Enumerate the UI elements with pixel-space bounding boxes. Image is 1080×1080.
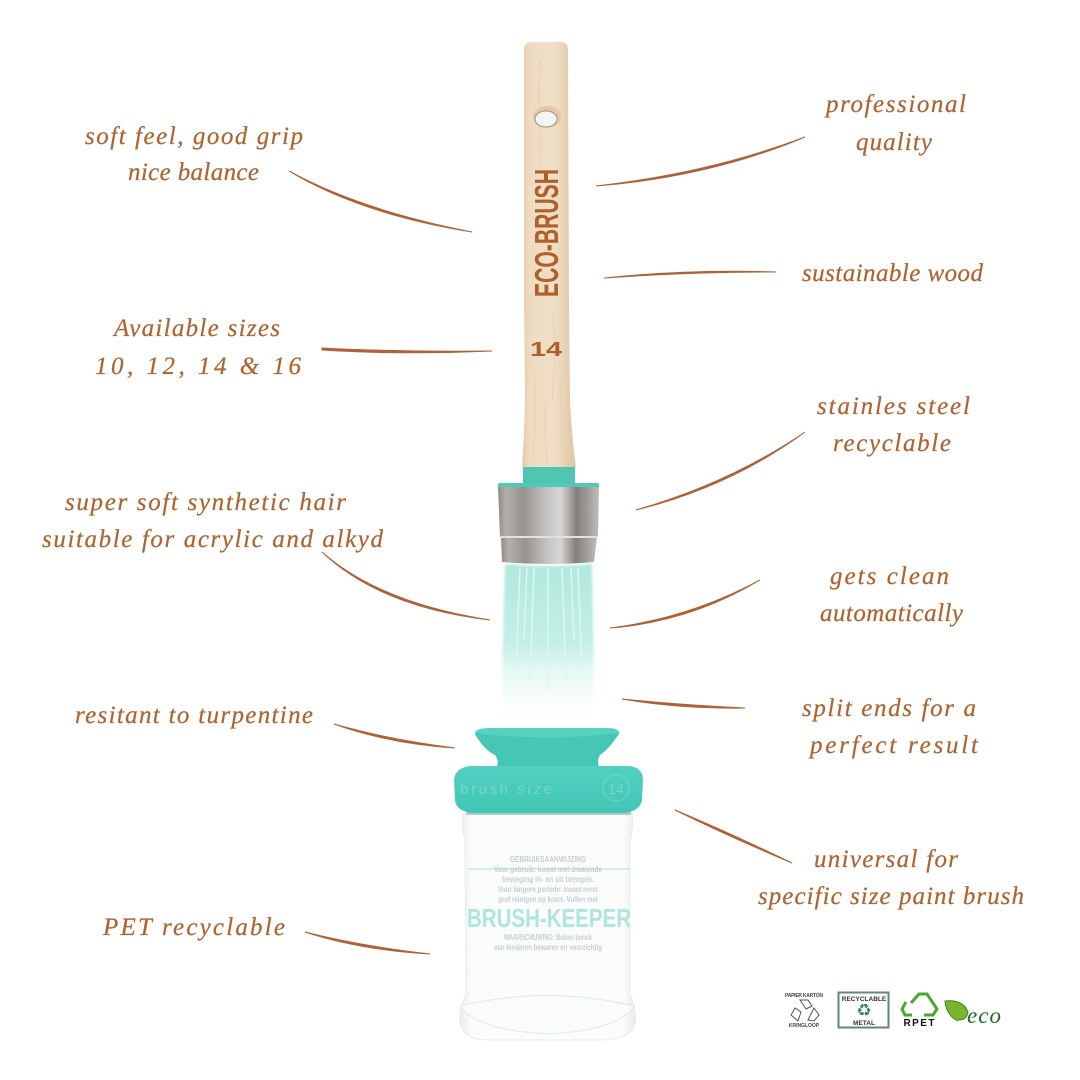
steel ferrule: [498, 487, 599, 564]
teal lid: 14: [608, 781, 624, 797]
paint brush: [498, 42, 599, 708]
recycling logos: [785, 992, 1001, 1029]
jar brand: BRUSH-KEEPER: [467, 903, 631, 933]
logo: recyclable metal: METAL: [853, 1020, 875, 1027]
logo: paper carton recycling: PAPIER KARTON: [785, 993, 823, 999]
logo: recyclable metal: ♻: [856, 1001, 872, 1021]
left callouts: 10, 12, 14 & 16: [95, 353, 302, 380]
right callouts: specific size paint brush: [758, 883, 1024, 910]
brush handle: [522, 42, 576, 467]
left callouts: super soft synthetic hair: [65, 489, 346, 516]
logo: recyclable metal: RECYCLABLE: [842, 996, 887, 1003]
logo: paper carton recycling: KRINGLOOP: [789, 1023, 820, 1029]
right callouts: sustainable wood: [802, 260, 984, 287]
jar instructions: van kinderen bewaren en voorzichtig: [494, 943, 602, 952]
right callouts: professional: [824, 91, 966, 118]
right callouts: [758, 91, 1024, 910]
jar instructions: Voor gebruik: kwast met draaiende: [494, 865, 602, 874]
callout lines: [289, 137, 805, 954]
logo: paper carton recycling: [785, 993, 823, 1029]
left callouts: suitable for acrylic and alkyd: [42, 526, 384, 553]
brand engraving: ECO-BRUSH: [528, 169, 565, 297]
right callouts: quality: [856, 129, 933, 156]
brush keeper jar: [454, 728, 643, 1040]
size number: 14: [530, 339, 563, 361]
logo: eco leaf: [945, 1001, 1001, 1028]
right callouts: gets clean: [830, 563, 949, 590]
logo: recyclable metal: [838, 992, 888, 1028]
right callouts: perfect result: [808, 732, 979, 759]
jar instructions: beweging in- en uit brengen.: [502, 875, 594, 884]
left callouts: Available sizes: [112, 315, 280, 342]
logo: RPET: RPET: [904, 1018, 934, 1029]
teal collar: [498, 467, 599, 489]
left callouts: resitant to turpentine: [75, 702, 313, 729]
teal lid: [454, 728, 643, 813]
left callouts: nice balance: [128, 159, 259, 186]
right callouts: universal for: [814, 846, 958, 873]
left callouts: [42, 123, 384, 941]
logo: eco leaf: eco: [967, 1003, 1001, 1028]
jar instructions: WAARSCHUWING: Buiten bereik: [504, 933, 592, 942]
left callouts: soft feel, good grip: [85, 123, 303, 150]
right callouts: split ends for a: [802, 695, 976, 722]
jar body: [460, 812, 635, 1040]
right callouts: stainles steel: [817, 393, 970, 420]
logo: RPET: [902, 994, 937, 1029]
synthetic bristles: [502, 564, 594, 708]
right callouts: recyclable: [833, 430, 951, 457]
handle hole: [533, 106, 561, 128]
jar instructions: GEBRUIKSAANWIJZING: [510, 855, 586, 864]
jar instructions: [494, 855, 602, 952]
teal lid: brush size: [460, 781, 552, 798]
jar instructions: Voor langere periode: kwast eerst: [498, 885, 598, 894]
left callouts: PET recyclable: [102, 914, 285, 941]
jar instructions: grof reinigen op krant. Vullen met: [498, 895, 598, 904]
right callouts: automatically: [820, 600, 964, 627]
